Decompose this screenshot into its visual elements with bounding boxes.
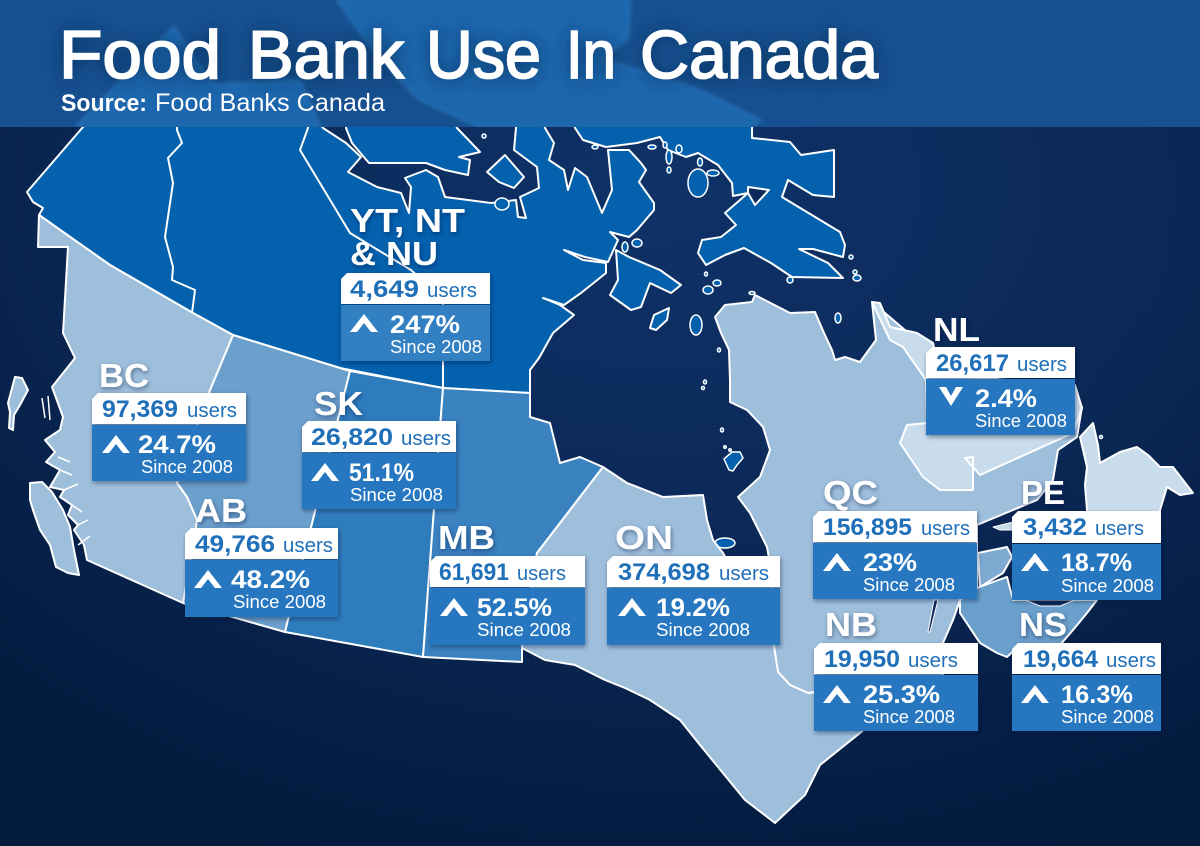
province: Ontario bbox=[522, 467, 880, 823]
card: YT, NT and NU bbox=[341, 202, 490, 361]
title: In bbox=[566, 17, 616, 93]
province: Newfoundland island bbox=[1079, 422, 1194, 511]
card: BC: users bbox=[187, 400, 237, 422]
card: QC: users bbox=[921, 518, 970, 540]
island: Haida Gwaii bbox=[8, 377, 28, 430]
card: AB: 49,766 bbox=[195, 531, 275, 558]
province: British Columbia bbox=[38, 215, 233, 603]
card: PE: users bbox=[1095, 518, 1144, 540]
card: ON bbox=[607, 519, 780, 645]
water: Northumberland pocket bbox=[1025, 600, 1075, 606]
province: Saskatchewan bbox=[285, 371, 443, 657]
region: King William Island bbox=[487, 155, 524, 188]
card: MB: users bbox=[517, 563, 566, 585]
card: BC: 24.7% bbox=[138, 431, 216, 459]
card: PE bbox=[1012, 474, 1161, 600]
card: NS: 16.3% bbox=[1061, 681, 1133, 709]
card: YT, NT and NU: 247% bbox=[390, 311, 460, 339]
card: AB bbox=[185, 492, 338, 617]
card: AB: 48.2% bbox=[231, 566, 310, 594]
card: NL: Since 2008 bbox=[975, 411, 1067, 431]
title: Canada bbox=[640, 17, 878, 93]
card: SK: Since 2008 bbox=[350, 485, 443, 505]
region: Victoria Island bbox=[345, 127, 481, 176]
card: YT, NT and NU: Since 2008 bbox=[390, 337, 482, 357]
province: Quebec bbox=[715, 295, 1082, 693]
card: SK: SK bbox=[314, 385, 363, 422]
island: Anticosti bbox=[993, 522, 1013, 530]
card: ON: ON bbox=[615, 519, 673, 556]
card: PE: 3,432 bbox=[1023, 514, 1087, 541]
card: NB: Since 2008 bbox=[863, 707, 955, 727]
island: Vancouver Island bbox=[30, 482, 79, 575]
card: QC: 156,895 bbox=[823, 514, 912, 541]
card: NS: 19,664 bbox=[1023, 646, 1099, 673]
province: Newfoundland and Labrador, Labrador bbox=[872, 302, 1082, 490]
card: QC: 23% bbox=[863, 549, 917, 577]
card: AB: users bbox=[283, 535, 333, 557]
region: northern New Brunswick bbox=[978, 547, 1012, 587]
card: QC bbox=[813, 474, 977, 599]
ghost map in header bbox=[76, 0, 760, 127]
card: NS: Since 2008 bbox=[1061, 707, 1154, 727]
card: MB: 61,691 bbox=[439, 559, 509, 586]
card: YT, NT and NU: 4,649 bbox=[350, 276, 419, 303]
card: PE: 18.7% bbox=[1061, 549, 1132, 577]
card: MB: MB bbox=[438, 519, 495, 556]
card: ON: users bbox=[719, 563, 769, 585]
territory boundary: YT and NT bbox=[165, 100, 195, 313]
card: NL bbox=[926, 311, 1075, 435]
title bbox=[59, 17, 878, 93]
card: NL: users bbox=[1017, 354, 1067, 376]
source line: Food Banks Canada bbox=[155, 89, 385, 117]
card: QC: Since 2008 bbox=[863, 575, 955, 595]
card: MB: Since 2008 bbox=[477, 620, 571, 640]
region: Mansel Island bbox=[650, 308, 669, 330]
region: Southampton Island bbox=[610, 250, 681, 310]
card: PE: Since 2008 bbox=[1061, 576, 1154, 596]
region: territories mainland bbox=[26, 127, 655, 393]
region: Baffin Island bbox=[574, 127, 846, 279]
card: SK: users bbox=[401, 428, 451, 450]
source line: Source: bbox=[61, 90, 147, 117]
card: ON: Since 2008 bbox=[656, 620, 750, 640]
water: Cumberland lake bbox=[748, 187, 769, 205]
card: MB bbox=[430, 519, 585, 645]
card: AB: Since 2008 bbox=[233, 592, 326, 612]
title: Bank bbox=[248, 17, 405, 93]
region: Nova Scotia and New Brunswick bbox=[960, 577, 1097, 657]
province: Manitoba bbox=[423, 388, 603, 662]
card: SK: 26,820 bbox=[311, 424, 393, 451]
card: NS: users bbox=[1106, 650, 1156, 672]
card: NB: NB bbox=[825, 606, 877, 643]
header band bbox=[0, 0, 1200, 127]
BC coastal inlets bbox=[42, 396, 90, 545]
inlet: Chaleur sliver bbox=[928, 600, 938, 632]
card: NB bbox=[814, 606, 978, 731]
card: ON: 19.2% bbox=[656, 594, 730, 622]
card: NS bbox=[1012, 606, 1161, 731]
card: BC: BC bbox=[99, 357, 149, 394]
card: NL: 2.4% bbox=[975, 385, 1037, 413]
card: NS: NS bbox=[1019, 606, 1067, 643]
card: YT, NT and NU: YT, NT bbox=[350, 202, 465, 239]
card: SK bbox=[302, 385, 456, 509]
card: NB: 25.3% bbox=[863, 681, 940, 709]
card: NB: 19,950 bbox=[824, 646, 900, 673]
card: NB: users bbox=[908, 650, 958, 672]
card: ON: 374,698 bbox=[618, 559, 710, 586]
card: YT, NT and NU: & NU bbox=[350, 235, 438, 272]
arctic and Hudson Bay islands bbox=[482, 134, 1102, 548]
card: SK: 51.1% bbox=[349, 459, 414, 487]
title: Food bbox=[59, 17, 221, 93]
card: BC: 97,369 bbox=[102, 396, 178, 423]
province: Alberta bbox=[177, 335, 350, 632]
card: MB: 52.5% bbox=[477, 594, 552, 622]
card: QC: QC bbox=[823, 474, 878, 511]
card: PE: PE bbox=[1021, 474, 1065, 511]
card: NL: NL bbox=[933, 311, 980, 348]
card: AB: AB bbox=[195, 492, 247, 529]
card: BC: Since 2008 bbox=[141, 457, 233, 477]
card: BC bbox=[92, 357, 246, 481]
territory boundary: NT and NU bbox=[300, 100, 443, 388]
card: YT, NT and NU: users bbox=[427, 280, 477, 302]
card: NL: 26,617 bbox=[936, 350, 1009, 377]
title: Use bbox=[426, 17, 541, 93]
